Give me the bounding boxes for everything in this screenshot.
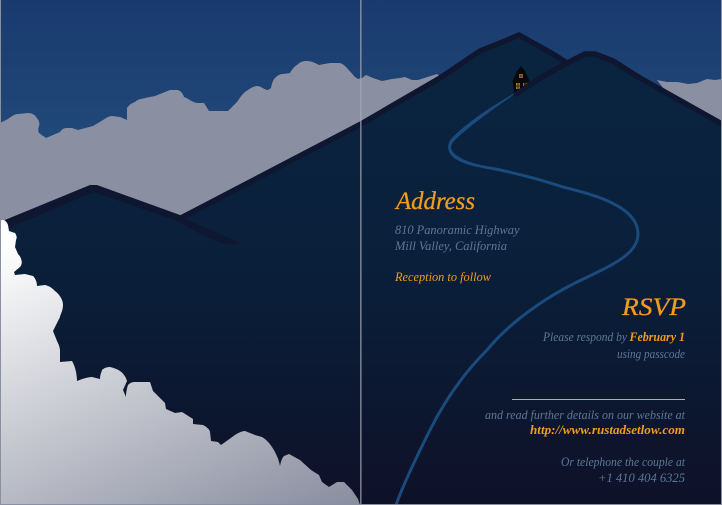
telephone text — [561, 455, 685, 485]
divider rule — [512, 399, 685, 400]
heading: Address: Address — [394, 186, 475, 215]
RSVP instructions — [542, 330, 685, 361]
far cloud bank right — [657, 79, 722, 130]
website text — [485, 408, 685, 437]
website text: and read further details on our website at — [485, 408, 685, 422]
address text: Mill Valley, California — [394, 239, 507, 253]
mountain: front peak — [470, 54, 722, 505]
RSVP instructions: using passcode — [617, 347, 685, 361]
address text — [394, 223, 520, 253]
reception note: Reception to follow — [394, 270, 492, 284]
telephone text: +1 410 404 6325 — [598, 471, 685, 485]
RSVP instructions: February 1 — [629, 330, 685, 344]
telephone text: Or telephone the couple at — [561, 455, 685, 469]
address text: 810 Panoramic Highway — [395, 223, 520, 237]
RSVP instructions: Please respond by — [542, 330, 627, 344]
fold line — [360, 0, 362, 505]
sky background — [0, 0, 722, 240]
far cloud bank left — [0, 61, 445, 240]
heading: RSVP: RSVP — [621, 292, 686, 321]
mountain: left foothill — [0, 185, 240, 505]
foreground cloud — [0, 220, 360, 505]
website text: http://www.rustadsetlow.com — [530, 423, 685, 437]
icon: house — [512, 66, 530, 97]
winding road — [396, 94, 638, 505]
